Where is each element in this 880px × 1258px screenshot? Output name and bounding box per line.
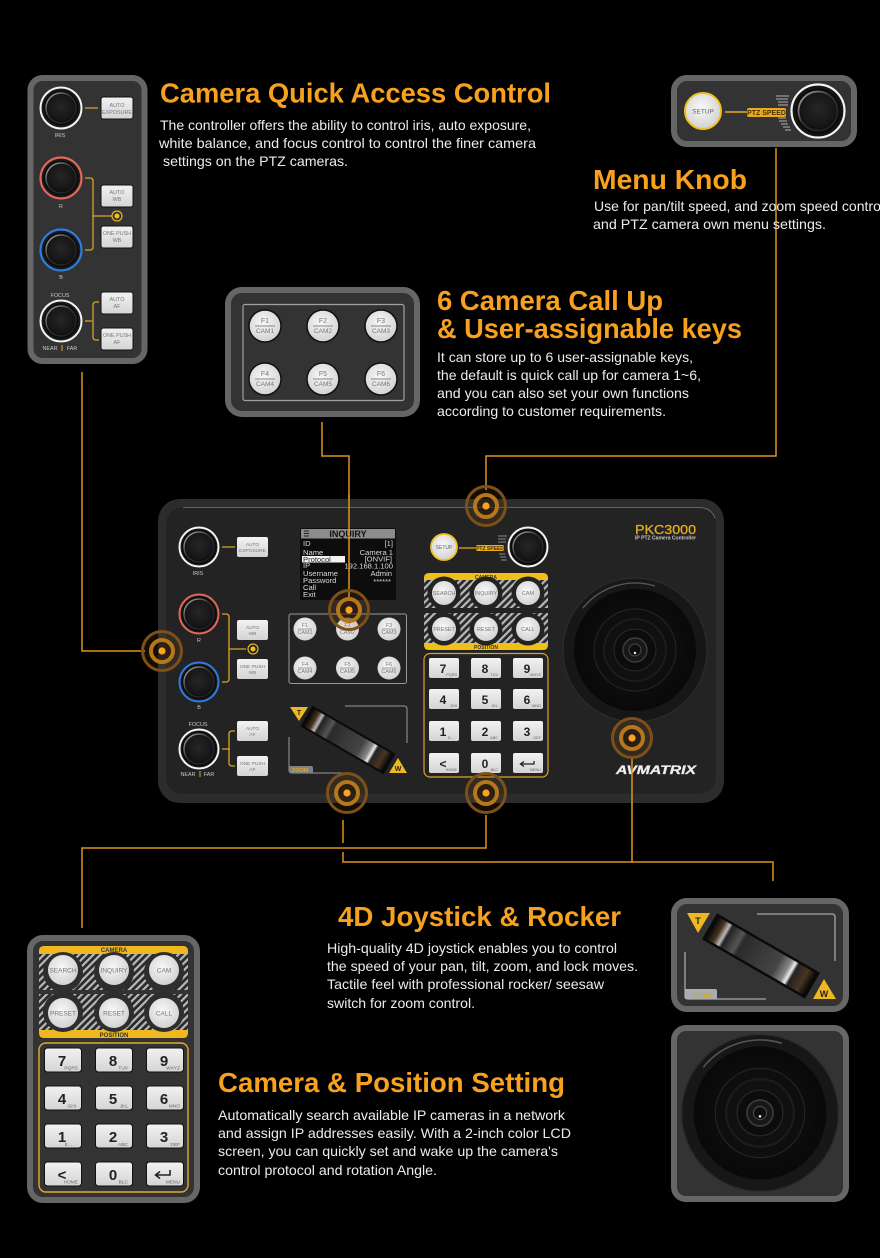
number keypad: 3	[524, 725, 531, 739]
text block: camera and position: screen, you can quickly set and wake up the camera's	[218, 1143, 558, 1159]
panel: camera and position zoom	[30, 938, 197, 1200]
LCD display: Username	[303, 569, 338, 578]
setup button	[685, 93, 721, 129]
knob labels: IRIS	[55, 133, 66, 139]
panel: camera and position zoom: CAMERA	[101, 948, 128, 954]
number keypad: MNO	[169, 1104, 180, 1110]
key F4: F4	[261, 371, 269, 378]
zoom rocker: T	[297, 710, 302, 717]
text block: 4d joystick: switch for zoom control.	[327, 995, 475, 1011]
number keypad: MENU	[166, 1180, 181, 1186]
knob labels: B	[197, 705, 201, 711]
key F2: F2	[319, 318, 327, 325]
key F3: CAM3	[382, 630, 396, 636]
function buttons: EXPOSURE	[239, 548, 266, 554]
zoom rocker: W	[395, 766, 402, 773]
key F2: CAM2	[340, 630, 355, 636]
key F5	[307, 363, 339, 395]
camera and position keys: POSITION	[474, 645, 498, 651]
reset key: RESET	[103, 1010, 125, 1018]
blue knob	[180, 662, 218, 702]
panel: joystick	[674, 1028, 846, 1199]
panel: zoom rocker	[674, 901, 846, 1009]
target marker: joystick	[612, 718, 652, 758]
number keypad: PQRS	[446, 673, 457, 677]
number keypad: GHI	[450, 704, 457, 708]
number keypad: BLC	[119, 1180, 129, 1186]
text block: 6 camera keys: and you can also set your own functions	[437, 385, 689, 401]
number keypad: HOME	[446, 768, 457, 772]
text block: camera quick access: settings on the PTZ cameras.	[163, 153, 348, 169]
call key	[144, 992, 184, 1032]
red knob	[40, 158, 82, 198]
heading: menu knob: Menu Knob	[593, 164, 747, 195]
call key: CALL	[156, 1010, 173, 1018]
key F4: F4	[302, 662, 308, 668]
function buttons: ONE PUSH	[240, 664, 266, 670]
zoom rocker	[289, 706, 407, 774]
number keypad: ABC	[118, 1142, 129, 1148]
LCD display: Name	[303, 548, 323, 557]
number keypad: MENU	[530, 768, 541, 772]
heading: 6 camera call up	[437, 285, 742, 344]
text block: camera and position	[218, 1107, 571, 1178]
LCD display: Exit	[303, 590, 317, 599]
key F5	[336, 656, 359, 680]
panel: zoom rocker: T	[695, 916, 701, 926]
buttons: WB	[113, 197, 122, 203]
inquiry key: INQUIRY	[475, 591, 498, 597]
key F3	[365, 310, 397, 342]
knob labels: FOCUS	[189, 722, 208, 728]
LCD display: [1]	[385, 539, 393, 548]
knob labels: R	[59, 204, 63, 210]
model name: PKC3000	[635, 522, 696, 537]
number keypad	[424, 654, 548, 777]
LCD display: [ONVIF]	[365, 554, 392, 564]
cam key	[144, 952, 184, 992]
number keypad: 6	[524, 693, 531, 707]
heading: camera quick access control: Camera Quick Access Control	[160, 78, 551, 108]
key F1: F1	[261, 318, 269, 325]
number keypad: GHI	[67, 1104, 76, 1110]
number keypad: 0	[109, 1167, 117, 1184]
text block: 6 camera keys: the default is quick call up for camera 1~6,	[437, 367, 701, 383]
key F6	[365, 363, 397, 395]
text block: 4d joystick: the speed of your pan, tilt, zoom, and lock moves.	[327, 958, 638, 974]
knob labels: B	[59, 275, 63, 281]
LCD display: 192.168.1.100	[344, 562, 393, 570]
number keypad: BLC	[491, 768, 498, 772]
text block: menu knob	[593, 198, 880, 232]
iris knob	[180, 528, 218, 566]
number keypad: HOME	[64, 1180, 78, 1186]
ptz speed label	[725, 108, 786, 117]
panel: camera and position zoom: POSITION	[100, 1033, 128, 1039]
function buttons: AUTO	[246, 726, 259, 732]
text block: camera quick access: white balance, and focus control to control the finer camera	[158, 135, 536, 151]
number keypad: 9	[160, 1053, 168, 1070]
wiring	[222, 547, 258, 766]
main controller device	[158, 499, 724, 803]
knob labels: IRIS	[193, 571, 204, 577]
setup and ptz speed	[431, 528, 548, 566]
reset key: RESET	[477, 627, 496, 633]
brand logo: AVMATRIX	[615, 763, 697, 777]
number keypad: JKL	[491, 704, 498, 708]
key F6: F6	[386, 662, 392, 668]
function buttons: AF	[249, 732, 256, 738]
search key	[43, 952, 83, 992]
menu knob	[792, 84, 844, 138]
camera and position keys: CAMERA	[475, 575, 497, 581]
target marker: keypad	[466, 774, 506, 812]
buttons: WB	[113, 238, 122, 244]
number keypad: 7	[440, 662, 447, 676]
function buttons: AF	[249, 767, 256, 773]
number keypad: 0	[482, 757, 489, 771]
zoom rocker: ZOOM	[292, 768, 309, 774]
text block: camera and position: Automatically search available IP cameras in a network	[218, 1107, 566, 1123]
setup and ptz speed: PTZ SPEED	[476, 546, 504, 552]
key F6	[378, 656, 400, 680]
buttons: AUTO	[110, 103, 124, 109]
text block: 6 camera keys	[437, 349, 701, 419]
text block: 6 camera keys: It can store up to 6 user-assignable keys,	[437, 349, 693, 365]
inquiry key: INQUIRY	[101, 968, 128, 974]
LCD display: Password	[303, 576, 336, 585]
knob labels: NEAR	[181, 772, 196, 778]
heading: 6 camera call up: & User-assignable keys	[437, 313, 742, 344]
LCD display: Protocol	[303, 555, 331, 564]
key F5: CAM5	[340, 669, 355, 675]
key F2	[307, 310, 339, 342]
number keypad: WXYZ	[166, 1066, 180, 1072]
key F4: CAM4	[256, 381, 274, 388]
number keypad: 1	[440, 725, 447, 739]
call key: CALL	[521, 627, 535, 633]
text block: camera and position: and assign IP addresses easily. With a 2-inch color LCD	[218, 1125, 571, 1141]
panel: camera quick access zoom	[30, 78, 144, 361]
LCD display: Admin	[370, 569, 392, 578]
knob labels	[43, 133, 77, 352]
number keypad: TUV	[118, 1066, 129, 1072]
number keypad: 9	[524, 662, 531, 676]
knob labels: NEAR	[43, 346, 58, 352]
key F1: CAM1	[298, 630, 312, 636]
iris knob	[40, 88, 82, 128]
LCD display: ID	[303, 539, 311, 548]
model name: IP PTZ Camera Controller	[635, 536, 696, 542]
number keypad: 8	[482, 662, 489, 676]
key F4: CAM4	[298, 669, 312, 675]
number keypad: 7	[58, 1053, 66, 1070]
number keypad: DEF	[170, 1142, 180, 1148]
number keypad: MNO	[532, 704, 541, 708]
red knob	[180, 594, 218, 634]
text block: menu knob: Use for pan/tilt speed, and zoom speed control	[594, 198, 880, 214]
function buttons: ONE PUSH	[240, 761, 266, 767]
inquiry key	[94, 952, 134, 992]
number keypad: JKL	[120, 1104, 128, 1110]
key F1: F1	[302, 623, 308, 629]
key F6: CAM6	[382, 669, 396, 675]
search key: SEARCH	[433, 591, 455, 597]
LCD display: INQUIRY	[329, 529, 367, 539]
buttons	[101, 97, 133, 350]
panel: 6 camera keys zoom	[228, 290, 417, 414]
number keypad: E...	[65, 1142, 72, 1148]
key F4	[249, 363, 281, 395]
connector lines	[82, 148, 776, 928]
function buttons: WB	[249, 670, 256, 676]
number keypad: 8	[109, 1053, 117, 1070]
heading: 4d joystick: 4D Joystick & Rocker	[338, 901, 621, 932]
search key: SEARCH	[49, 968, 77, 974]
number keypad: E...	[448, 736, 454, 740]
joystick	[563, 578, 707, 722]
function buttons	[237, 537, 268, 776]
number keypad: 4	[58, 1091, 67, 1108]
text block: camera quick access: The controller offers the ability to control iris, auto exposure,	[160, 117, 531, 133]
preset key	[43, 992, 83, 1032]
key F2: CAM2	[314, 328, 332, 335]
key F2: F2	[344, 623, 351, 629]
text block: camera quick access	[158, 117, 536, 169]
key F1: CAM1	[256, 328, 274, 335]
buttons: ONE PUSH	[103, 333, 131, 339]
text block: 6 camera keys: according to customer requirements.	[437, 403, 666, 419]
key F3: F3	[377, 318, 385, 325]
LCD display: Camera 1	[360, 548, 393, 557]
reset key	[94, 992, 134, 1032]
number keypad: 5	[109, 1091, 117, 1108]
wiring	[85, 108, 122, 340]
preset key: PRESET	[433, 627, 455, 633]
key F3: F3	[386, 623, 392, 629]
number keypad	[39, 1043, 188, 1192]
target marker: rocker	[328, 774, 366, 812]
number keypad: TUV	[490, 673, 498, 677]
ptz speed label: PTZ SPEED	[747, 110, 786, 117]
number keypad: PQRS	[64, 1066, 78, 1072]
number keypad: 3	[160, 1129, 168, 1146]
buttons: AF	[114, 340, 121, 346]
target marker: menu knob	[466, 486, 506, 526]
knob labels: FAR	[67, 346, 77, 352]
function buttons: WB	[249, 631, 256, 637]
number keypad: 5	[482, 693, 489, 707]
number keypad: <	[439, 757, 447, 771]
number keypad: 2	[109, 1129, 117, 1146]
knob labels: FAR	[204, 772, 214, 778]
setup and ptz speed: SETUP	[436, 545, 453, 551]
function buttons: AUTO	[246, 542, 259, 548]
panel: zoom rocker: ZOOM	[690, 993, 712, 1000]
LCD display	[300, 528, 396, 600]
number keypad: 2	[482, 725, 489, 739]
connector lines over device	[349, 495, 632, 804]
key F1	[249, 310, 281, 342]
number keypad: 1	[58, 1129, 66, 1146]
buttons: EXPOSURE	[102, 110, 132, 116]
cam key: CAM	[157, 968, 171, 974]
buttons: ONE PUSH	[103, 231, 131, 237]
key F4	[294, 656, 316, 680]
number keypad: WXYZ	[530, 673, 542, 677]
knob labels	[181, 571, 214, 778]
camera and position keys	[424, 573, 548, 651]
target marker: f keys	[330, 590, 368, 630]
key F2	[336, 618, 359, 640]
buttons: AUTO	[110, 297, 124, 303]
cam key: CAM	[522, 591, 534, 597]
LCD display: ******	[373, 577, 391, 586]
heading: 6 camera call up: 6 Camera Call Up	[437, 285, 663, 316]
key F5: CAM5	[314, 381, 332, 388]
key F3	[378, 618, 400, 640]
number keypad: ABC	[490, 736, 498, 740]
knob labels: FOCUS	[51, 293, 70, 299]
focus knob	[40, 300, 82, 342]
buttons: AF	[114, 304, 121, 310]
heading: camera and position setting: Camera & Position Setting	[218, 1067, 565, 1098]
number keypad: 4	[440, 693, 447, 707]
blue knob	[40, 230, 82, 270]
focus knob	[180, 730, 218, 768]
preset key: PRESET	[50, 1010, 76, 1018]
key F5: F5	[319, 371, 327, 378]
buttons: AUTO	[110, 190, 124, 196]
F keys group	[289, 614, 406, 684]
text block: camera and position: control protocol and rotation Angle.	[218, 1162, 437, 1178]
key F6: F6	[377, 371, 385, 378]
key F1	[294, 618, 316, 640]
target marker: left	[142, 632, 182, 670]
speed scale	[776, 96, 791, 130]
key F5: F5	[344, 662, 351, 668]
text block: 4d joystick: Tactile feel with professional rocker/ seesaw	[327, 976, 605, 992]
text block: 4d joystick: High-quality 4D joystick enables you to control	[327, 940, 617, 956]
text block: menu knob: and PTZ camera own menu settings.	[593, 216, 826, 232]
number keypad: 6	[160, 1091, 168, 1108]
panel: zoom rocker: W	[820, 989, 829, 999]
key F6: CAM6	[372, 381, 390, 388]
number keypad: DEF	[533, 736, 542, 740]
LCD display: Call	[303, 583, 316, 592]
setup button: SETUP	[692, 108, 714, 116]
number keypad: <	[58, 1167, 67, 1184]
text block: 4d joystick	[327, 940, 638, 1011]
function buttons: AUTO	[246, 625, 259, 631]
LCD display: IP	[303, 561, 310, 570]
panel: menu knob zoom	[674, 78, 854, 144]
knob labels: R	[197, 638, 201, 644]
key F3: CAM3	[372, 328, 390, 335]
